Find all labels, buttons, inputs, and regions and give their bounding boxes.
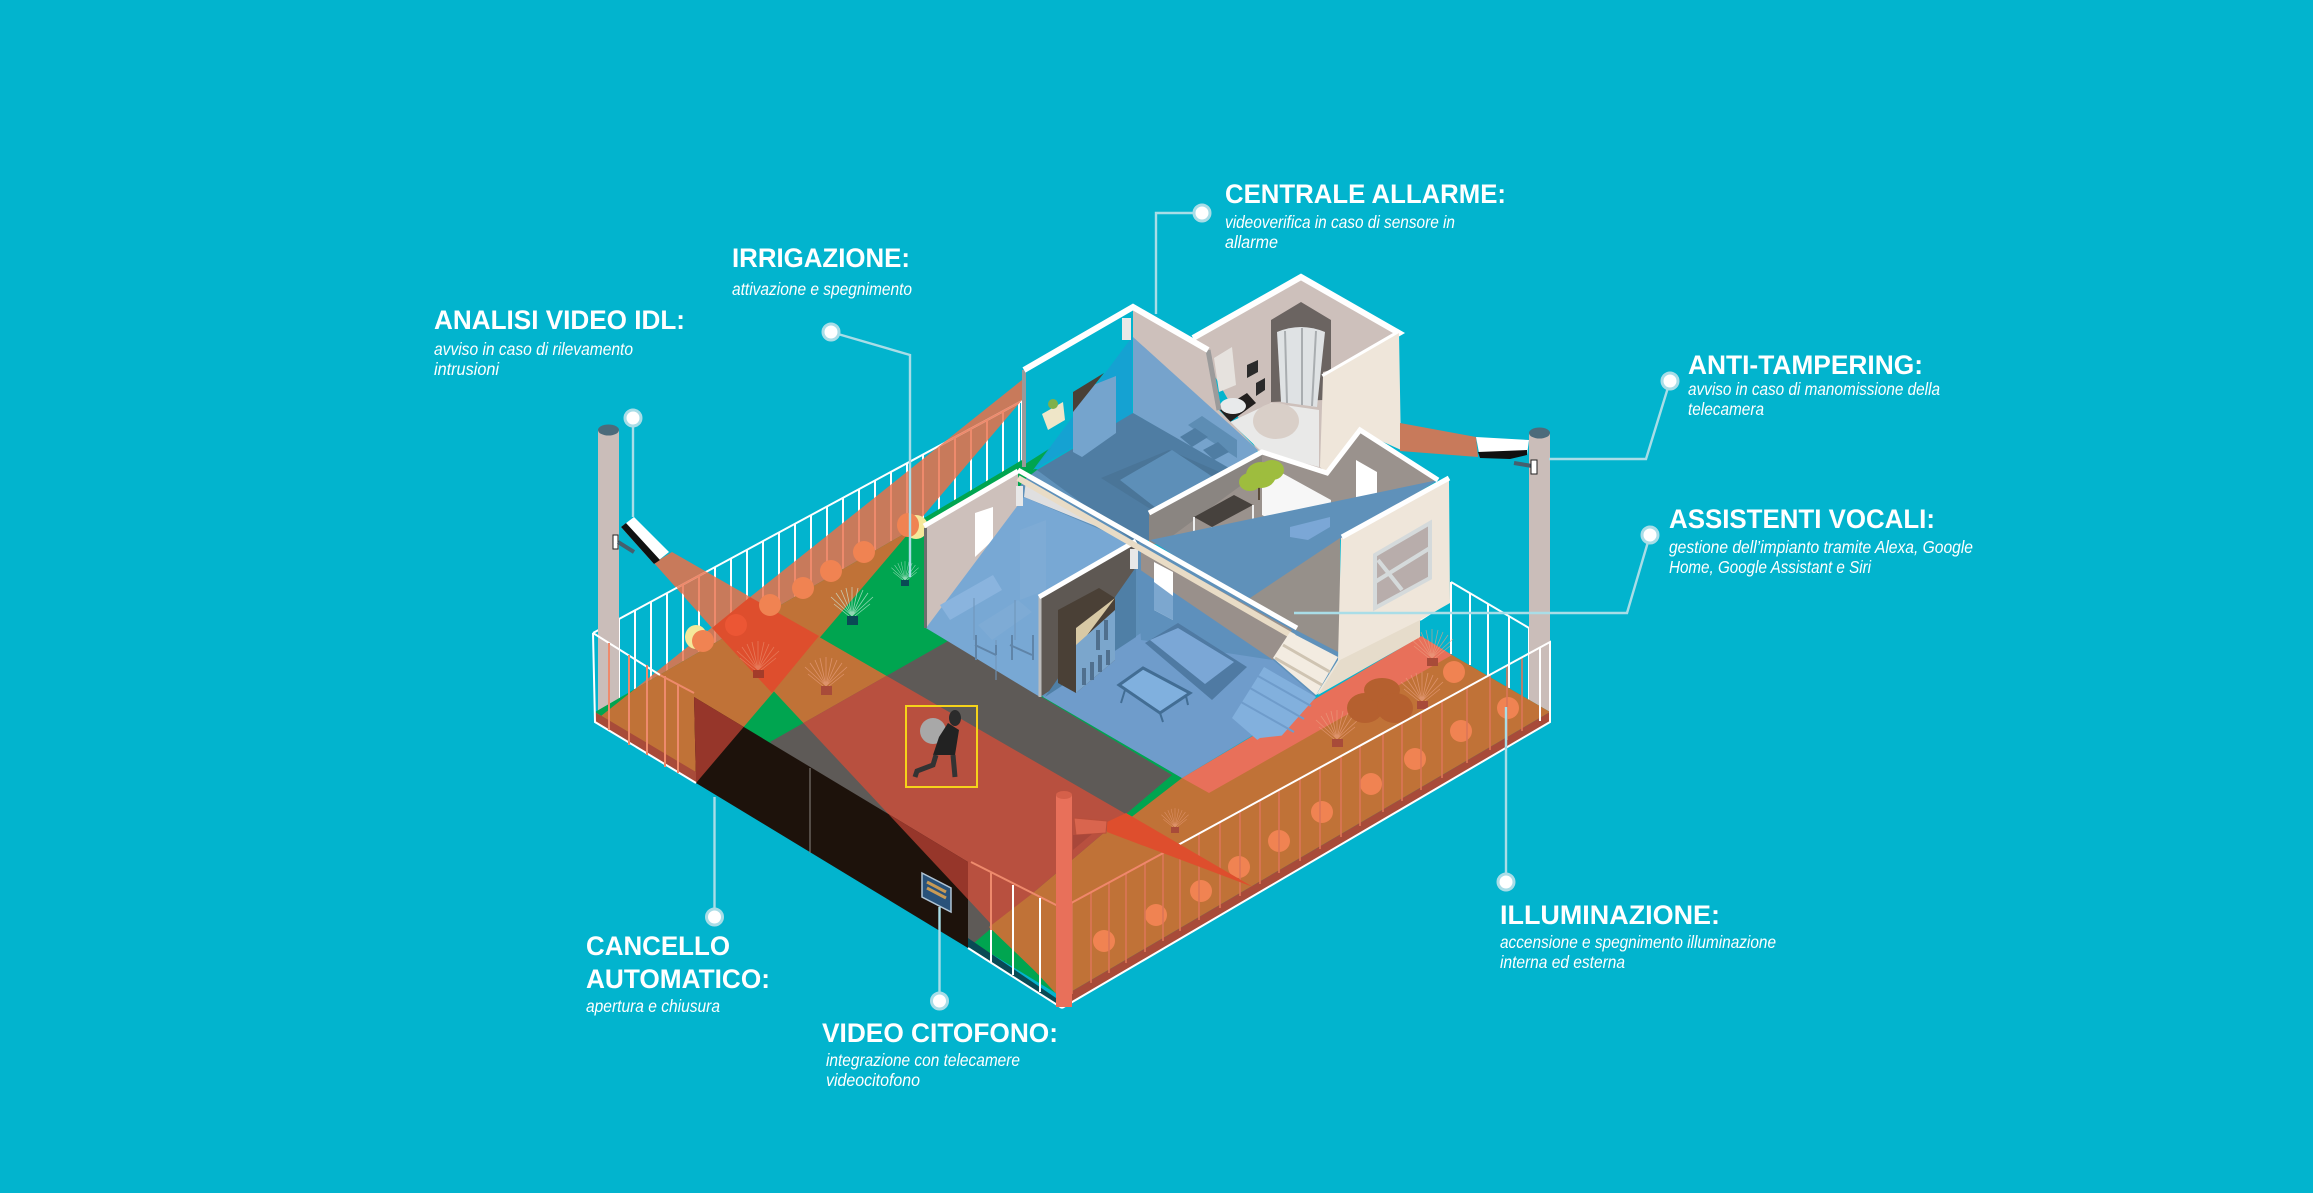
pole: front (1056, 791, 1072, 1007)
lighting: right row (1093, 661, 1519, 952)
callout: anti-tampering (1549, 350, 1940, 459)
callout: analisi video IDL: ANALISI VIDEO IDL: (434, 305, 685, 335)
callout: anti-tampering: ANTI-TAMPERING: (1688, 350, 1923, 380)
beam overlap (712, 597, 819, 693)
living room (1043, 547, 1316, 778)
icon: video intercom (922, 873, 951, 912)
callout: centrale allarme: CENTRALE ALLARME: (1225, 179, 1506, 209)
callout: anti-tampering: telecamera (1688, 399, 1764, 419)
house footprint (926, 470, 1340, 778)
right wall (1247, 538, 1340, 653)
bathroom (1193, 277, 1399, 470)
beam: left camera and fence sweep over sky (596, 380, 1022, 783)
callout: illuminazione: accensione e spegnimento illuminazione (1500, 932, 1776, 952)
stairs under beam (1250, 733, 1306, 756)
ground: lawn, driveway, gate and sensor zones (596, 469, 1549, 1003)
callout: anti-tampering: avviso in caso di manomissione della (1688, 379, 1940, 399)
camera: right with beam (1400, 423, 1537, 474)
callout: irrigazione: attivazione e spegnimento (732, 279, 912, 299)
callout: illuminazione (1498, 707, 1776, 972)
fence: front left (593, 633, 1062, 1008)
callout: irrigazione (732, 243, 912, 577)
pole: left (598, 424, 619, 715)
callout: cancello automatico: CANCELLO (586, 931, 730, 961)
callout: video citofono (822, 907, 1058, 1090)
callout: cancello automatico: AUTOMATICO: (586, 964, 770, 994)
callout: video citofono: integrazione con telecamere (826, 1050, 1020, 1070)
callout: analisi video IDL (434, 305, 685, 517)
callout: illuminazione: interna ed esterna (1500, 952, 1625, 972)
bedroom (1024, 307, 1258, 543)
house (924, 277, 1450, 778)
callout: assistenti vocali: Home, Google Assistant e Siri (1669, 557, 1872, 577)
exterior beige wall (1320, 333, 1401, 473)
lighting: yellow lamps (685, 515, 928, 649)
callout: illuminazione: ILLUMINAZIONE: (1500, 900, 1720, 930)
intruder in detection box (906, 706, 977, 787)
callout: assistenti vocali: gestione dell’impianto tramite Alexa, Google (1669, 537, 1973, 557)
camera: left (613, 517, 669, 564)
callout: analisi video IDL: avviso in caso di rilevamento (434, 339, 633, 359)
gate divider (809, 768, 811, 853)
callout: assistenti vocali: ASSISTENTI VOCALI: (1669, 504, 1935, 534)
callout: video citofono: videocitofono (826, 1070, 920, 1090)
callout: centrale allarme: videoverifica in caso di sensore in (1225, 212, 1455, 232)
callout: irrigazione: IRRIGAZIONE: (732, 243, 910, 273)
bush (1347, 678, 1413, 723)
callout: centrale allarme (1156, 179, 1506, 314)
sprinklers (737, 561, 1453, 833)
callout: centrale allarme: allarme (1225, 232, 1278, 252)
fence: front right (1062, 642, 1550, 1008)
stairs (1273, 632, 1338, 695)
central dark wall with bookcase (1039, 541, 1138, 697)
callout: analisi video IDL: intrusioni (434, 359, 500, 379)
green strip along back wall (924, 447, 1052, 532)
upper right room (1149, 430, 1438, 602)
callout: cancello automatico: apertura e chiusura (586, 996, 720, 1016)
callout: cancello automatico (586, 797, 770, 1016)
camera: front with beam (1073, 813, 1253, 887)
kitchen (924, 471, 1130, 697)
exterior front wall with window (1316, 478, 1450, 695)
spine wall cap (1018, 470, 1297, 637)
lighting: left row (692, 513, 919, 652)
fence: back left (593, 401, 1022, 698)
callout: video citofono: VIDEO CITOFONO: (822, 1018, 1058, 1048)
callout: assistenti vocali (1294, 504, 1973, 613)
beam: bedroom sensor over sky (1033, 337, 1132, 470)
pole: right (1529, 428, 1550, 713)
fence: back right (1420, 582, 1529, 700)
